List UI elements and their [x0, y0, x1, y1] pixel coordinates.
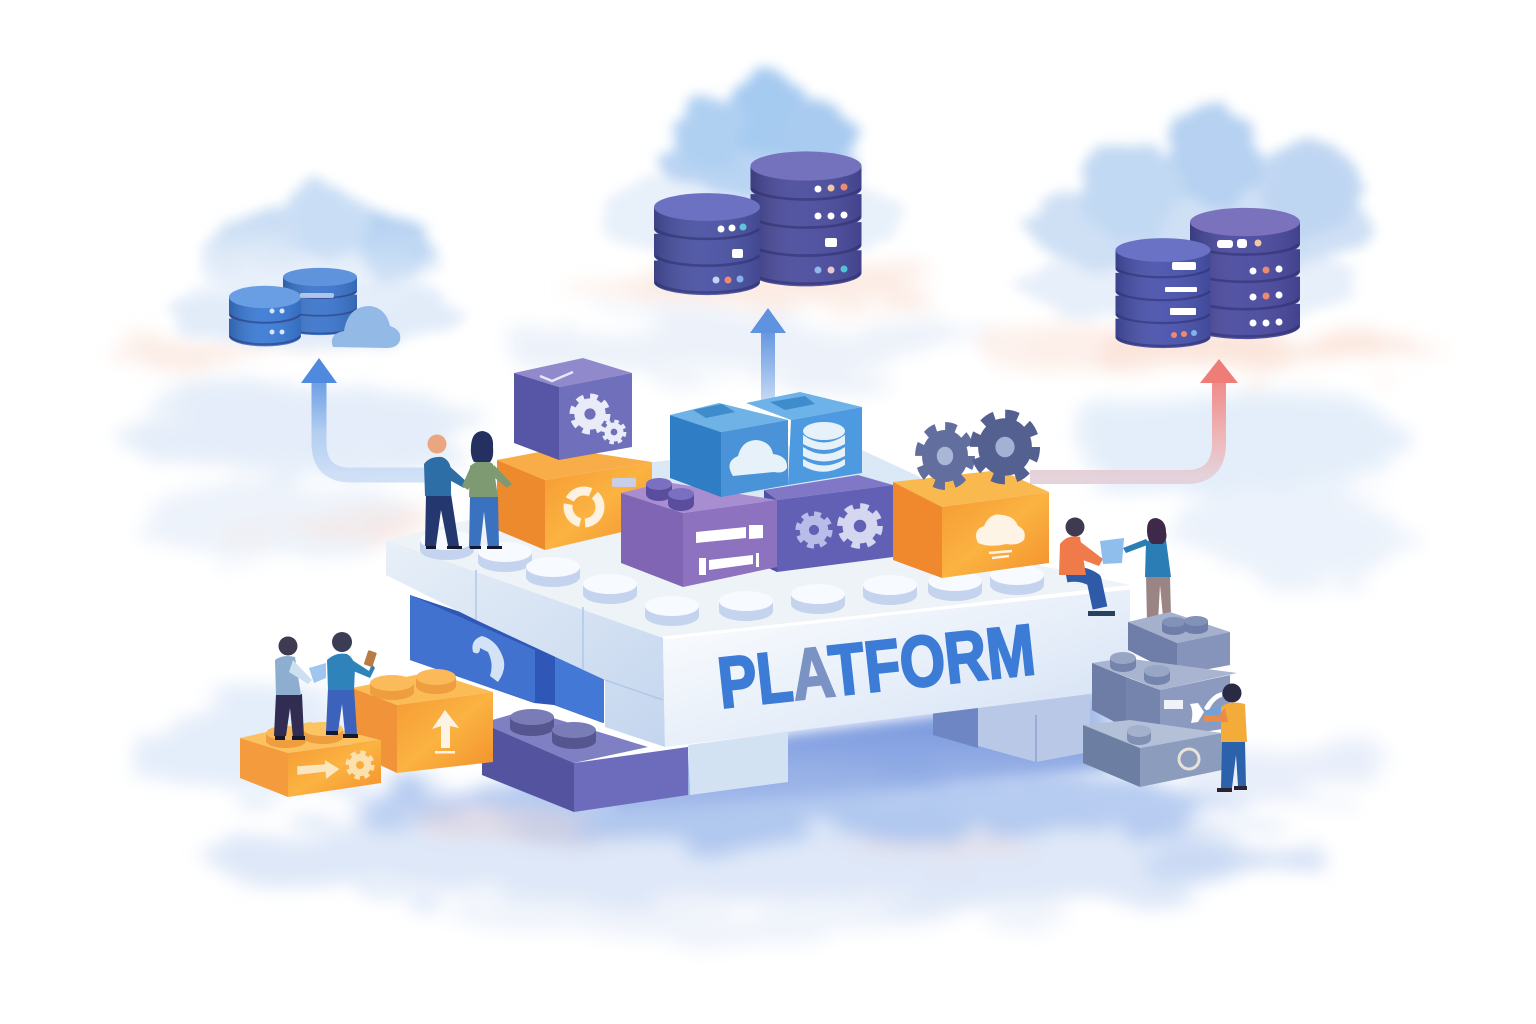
icon: cloud — [976, 514, 1025, 546]
ground clouds — [130, 695, 1390, 935]
icon: up arrow — [432, 710, 459, 748]
icon: lower bar — [699, 553, 759, 575]
arrow: centre, blue — [750, 308, 786, 408]
icon: right arrow — [298, 761, 338, 778]
platform studs — [420, 530, 1044, 626]
brick: grey top step — [1128, 612, 1230, 675]
studs on purple brick — [646, 478, 694, 511]
arrow: left, blue — [301, 358, 432, 475]
cloud: left — [170, 180, 470, 347]
cube: blue with database — [746, 392, 862, 485]
database: left back — [283, 268, 357, 335]
status lights — [270, 293, 334, 334]
icon: upper bar — [696, 525, 763, 543]
brick: light leg under platform — [688, 732, 788, 795]
panel: recessed blue side panel — [410, 595, 604, 723]
brick: purple lower step — [482, 709, 688, 812]
icon: swirl on panel — [472, 636, 504, 682]
brick: small orange with arrow and gear — [240, 722, 381, 797]
brick: indigo with gears — [764, 475, 893, 572]
watercolor sky wash — [115, 263, 1460, 575]
brick: purple with bars — [621, 482, 777, 587]
icon: gear — [348, 753, 372, 777]
icon: gears — [573, 397, 607, 431]
brick: grey bottom step — [1083, 720, 1222, 787]
person: woman in green — [462, 431, 512, 549]
icon: cloud — [729, 440, 787, 476]
brick: orange with cloud — [893, 470, 1049, 578]
brick: right platform leg — [933, 690, 1090, 762]
database: right front — [1116, 238, 1210, 348]
icon: gear right — [841, 507, 879, 545]
cube: purple with gears — [514, 358, 632, 460]
person: woman in blue — [1123, 518, 1171, 624]
database group: right — [1116, 208, 1300, 348]
person: bald man in blue — [424, 434, 468, 549]
icon: sync ring — [568, 491, 600, 523]
platform front face — [663, 588, 1130, 747]
platform base — [386, 440, 1130, 760]
cloud: centre — [600, 70, 900, 260]
person: man with phone — [326, 632, 377, 738]
database group: centre — [654, 151, 862, 295]
database: centre front — [654, 193, 760, 295]
database: centre back — [750, 151, 862, 286]
icon: large grey gear — [920, 427, 970, 485]
brick: orange under purple cube — [497, 448, 652, 550]
document held between people — [1100, 538, 1124, 564]
person: man with paper, grey-blue — [274, 636, 326, 740]
icon: larger dark gear — [975, 415, 1035, 479]
platform top surface — [386, 478, 1130, 638]
status lights — [1165, 239, 1282, 338]
platform lower right face — [1090, 682, 1130, 760]
icon: funnel — [1190, 703, 1204, 723]
platform left face — [386, 540, 665, 747]
icon: copyright ring — [1179, 749, 1199, 769]
icon: small cloud — [332, 306, 400, 348]
database group: left — [229, 268, 400, 348]
brick: orange with up arrow — [352, 669, 493, 773]
database: left front — [229, 286, 301, 346]
brick: grey middle step — [1092, 652, 1237, 738]
platform title text: PLATFORM — [714, 610, 1039, 724]
arrow: right, red — [1030, 359, 1238, 477]
person: seated man in orange — [1059, 518, 1115, 616]
person: worker in yellow vest — [1204, 684, 1247, 792]
database: right back — [1190, 208, 1300, 339]
cloud: right — [1020, 105, 1375, 325]
icon: gear left — [798, 514, 830, 546]
icon: database — [803, 422, 845, 472]
platform back block behind the bricks — [620, 440, 1000, 540]
cube: blue with cloud — [670, 403, 788, 497]
platform shadow — [600, 695, 1110, 815]
status lights — [712, 184, 848, 284]
